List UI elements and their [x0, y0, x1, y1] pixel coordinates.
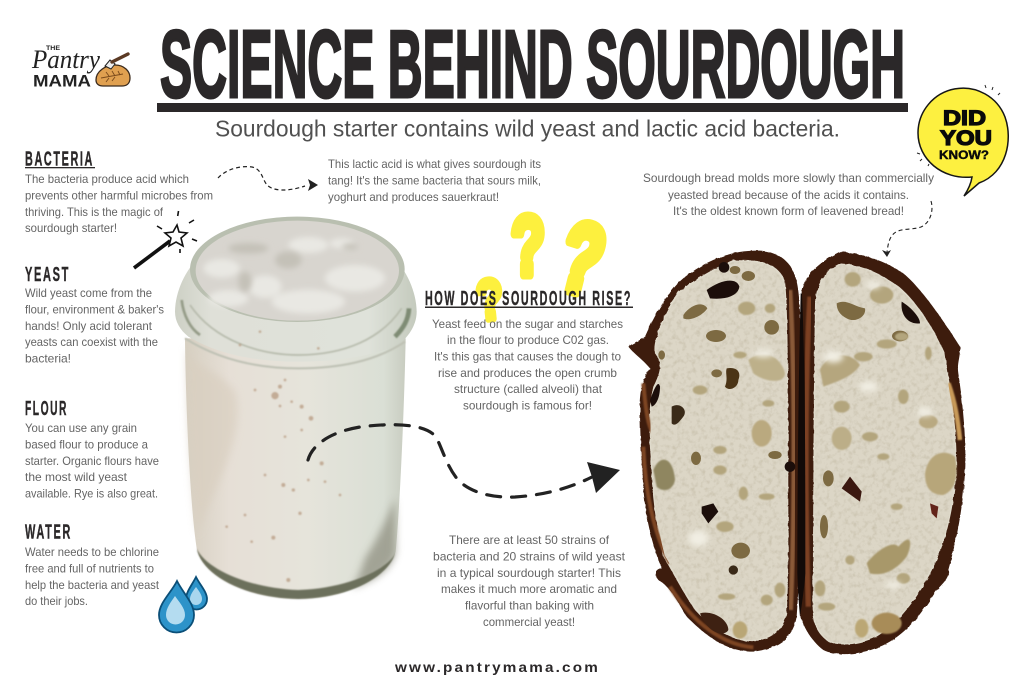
- heading: yeast: YEAST: [25, 264, 70, 286]
- footer: website: www.pantrymama.com: [394, 659, 600, 675]
- text: lactic acid note: tang! It's the same bacteria that sours milk,: [328, 174, 541, 188]
- panel: how does sourdough rise: [425, 288, 633, 412]
- text: bacteria body: The bacteria produce acid which: [25, 173, 189, 186]
- text: rise body: [432, 318, 623, 412]
- text: strains note: commercial yeast!: [483, 616, 575, 629]
- icon: magic wand: [134, 211, 197, 268]
- text: strains note: in a typical sourdough starter! This: [437, 567, 621, 580]
- text: strains note: flavorful than baking with: [465, 600, 594, 612]
- text: bacteria body: sourdough starter!: [25, 222, 117, 235]
- text: bacteria body: thriving. This is the magic of: [25, 206, 164, 219]
- text: flour body: You can use any grain: [25, 422, 137, 435]
- text: mold note: Sourdough bread molds more slowly than commercially: [643, 172, 934, 185]
- text: rise body: Yeast feed on the sugar and starches: [432, 318, 623, 331]
- crumb holes: shaded: [658, 266, 908, 634]
- heading: how does sourdough rise: HOW DOES SOURDOUGH RISE?: [425, 288, 632, 310]
- starter surface: [190, 217, 405, 322]
- heading: bacteria: [25, 148, 95, 170]
- logo: The Pantry Mama: [31, 45, 130, 90]
- text: flour body: starter. Organic flours have: [25, 455, 159, 468]
- text: water body: do their jobs.: [25, 595, 88, 608]
- title underline bar: [157, 103, 908, 112]
- text: mold note: [643, 172, 934, 218]
- text: water body: free and full of nutrients to: [25, 562, 154, 576]
- crumb texture: [650, 261, 955, 643]
- text: yeast body: [25, 287, 164, 366]
- panel: yeast: [25, 264, 164, 366]
- text: lactic acid note: yoghurt and produces sauerkraut!: [328, 191, 499, 204]
- logo: The Pantry Mama: Pantry: [31, 45, 100, 74]
- callout: did you know bubble: DID: [943, 107, 986, 130]
- text: strains note: makes it much more aromatic and: [441, 583, 617, 596]
- text: rise body: It's this gas that causes the dough to: [434, 350, 621, 364]
- icon: water drops: [159, 577, 207, 632]
- text: bacteria body: prevents other harmful microbes from: [25, 190, 213, 202]
- crumb highlights: [688, 281, 933, 588]
- heading: flour: FLOUR: [25, 398, 68, 420]
- heading: bacteria: BACTERIA: [25, 148, 94, 170]
- text: rise body: structure (called alveoli) that: [454, 383, 603, 396]
- text: rise body: sourdough is famous for!: [463, 400, 592, 412]
- starter speckles: [225, 330, 341, 582]
- callout: did you know bubble: YOU: [940, 127, 992, 150]
- decoration: yellow question marks: ?: [474, 267, 506, 332]
- text: strains note: There are at least 50 strains of: [449, 534, 610, 547]
- crumb holes: soft tan: [653, 272, 956, 639]
- bread: left half: [628, 251, 802, 652]
- arrow: big dashed jar to bread: [308, 425, 620, 497]
- text: strains note: [433, 534, 626, 629]
- bread: right half: [800, 252, 965, 654]
- text: yeast body: hands! Only acid tolerant: [25, 320, 153, 333]
- crumb holes: dark: [650, 262, 938, 523]
- text: yeast body: flour, environment & baker's: [25, 304, 164, 316]
- text: rise body: in the flour to produce C02 gas.: [447, 334, 609, 347]
- image: sliced sourdough loaf: [628, 251, 965, 654]
- arrow: to bread: [882, 201, 932, 257]
- logo: The Pantry Mama: MAMA: [33, 72, 91, 90]
- illustration: sourdough starter jar: [175, 217, 417, 599]
- text: rise body: rise and produces the open crumb: [438, 367, 617, 380]
- jar rim: [175, 217, 417, 368]
- decoration: yellow question marks: [474, 199, 615, 332]
- text: flour body: based flour to produce a: [25, 438, 149, 452]
- text: lactic acid note: This lactic acid is what gives sourdough its: [328, 158, 541, 171]
- text: water body: help the bacteria and yeast: [25, 579, 160, 592]
- text: yeast body: bacteria!: [25, 352, 71, 366]
- panel: bacteria: [25, 148, 213, 235]
- text: mold note: It's the oldest known form of leavened bread!: [673, 205, 904, 218]
- text: yeast body: yeasts can coexist with the: [25, 336, 158, 349]
- heading: water: WATER: [25, 522, 72, 544]
- text: water body: [25, 546, 160, 608]
- text: yeast body: Wild yeast come from the: [25, 287, 152, 300]
- arrow: to lactic acid note: [218, 167, 318, 191]
- text: flour body: the most wild yeast: [25, 471, 128, 484]
- decoration: yellow question marks: ?: [550, 200, 615, 317]
- callout: did you know bubble: [917, 85, 1008, 196]
- text: flour body: [25, 422, 159, 500]
- text: water body: Water needs to be chlorine: [25, 546, 159, 559]
- text: lactic acid note: [328, 158, 541, 204]
- callout: did you know bubble: KNOW?: [939, 150, 989, 162]
- logo: The Pantry Mama: THE: [46, 45, 61, 52]
- text: bacteria body: [25, 173, 213, 235]
- panel: flour: [25, 398, 159, 500]
- text: mold note: yeasted bread because of the acids it contains.: [668, 189, 909, 202]
- decoration: yellow question marks: ?: [511, 199, 545, 293]
- text: strains note: bacteria and 20 strains of wild yeast: [433, 550, 626, 564]
- subtitle: Sourdough starter contains wild yeast and lactic acid bacteria.: [215, 116, 840, 142]
- text: flour body: available. Rye is also great.: [25, 488, 158, 500]
- panel: water: [25, 522, 160, 608]
